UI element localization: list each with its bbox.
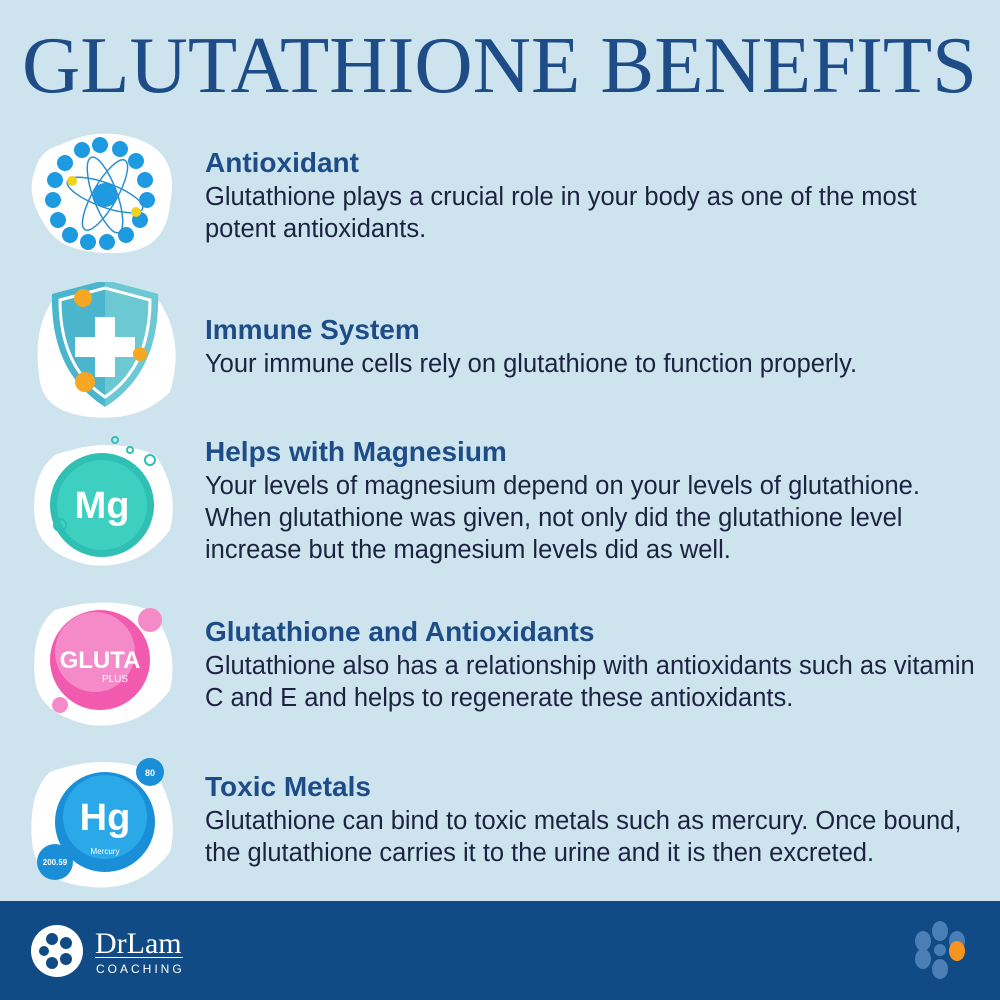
- logo: DrLam: COACHING: [96, 962, 185, 976]
- icon: shield: [38, 282, 176, 418]
- footer: [0, 901, 1000, 1000]
- icon: gluta plus: [34, 602, 172, 726]
- logo: flower: [915, 921, 965, 979]
- icon: mercury: 80: [145, 768, 155, 778]
- panel: antioxidant: Glutathione plays a crucial role in your body as one of the most: [205, 183, 917, 211]
- icon: mercury: 200.59: [43, 858, 68, 867]
- panel: gluta antioxidants: C and E and helps to regenerate these antioxidants.: [205, 684, 793, 712]
- panel: gluta antioxidants: [205, 616, 975, 712]
- icon: magnesium: Mg: [75, 485, 129, 527]
- panel: immune system: Immune System: [205, 314, 420, 345]
- panel: magnesium: [205, 436, 920, 564]
- icon: mercury: Mercury: [91, 847, 119, 856]
- panel: antioxidant: [205, 147, 917, 243]
- panel: antioxidant: Antioxidant: [205, 147, 359, 178]
- icon: antioxidant atom: [32, 134, 172, 254]
- panel: magnesium: Your levels of magnesium depend on your levels of glutathione.: [205, 472, 920, 500]
- logo: DrLam: DrLam: [95, 927, 182, 960]
- panel: antioxidant: potent antioxidants.: [205, 215, 426, 243]
- panel: toxic metals: Glutathione can bind to toxic metals such as mercury. Once bound,: [205, 807, 961, 835]
- panel: magnesium: increase but the magnesium levels did as well.: [205, 536, 731, 564]
- panel: gluta antioxidants: Glutathione also has a relationship with antioxidants such as vitamin: [205, 652, 975, 680]
- icon: gluta plus: PLUS: [102, 674, 128, 685]
- icon: mercury: [31, 758, 173, 888]
- panel: gluta antioxidants: Glutathione and Antioxidants: [205, 616, 594, 647]
- icon: magnesium: [34, 436, 173, 566]
- icon: mercury: Hg: [80, 797, 130, 839]
- panel: magnesium: Helps with Magnesium: [205, 436, 507, 467]
- logo: DrLam: [31, 925, 185, 977]
- panel: immune system: Your immune cells rely on glutathione to function properly.: [205, 350, 857, 378]
- icon: gluta plus: GLUTA: [60, 647, 140, 674]
- panel: magnesium: When glutathione was given, not only did the glutathione level: [205, 504, 902, 532]
- panel: toxic metals: [205, 771, 961, 867]
- panel: toxic metals: the glutathione carries it to the urine and it is then excreted.: [205, 839, 874, 867]
- panel: immune system: [205, 314, 857, 378]
- title: GLUTATHIONE BENEFITS: [22, 22, 977, 110]
- panel: toxic metals: Toxic Metals: [205, 771, 371, 802]
